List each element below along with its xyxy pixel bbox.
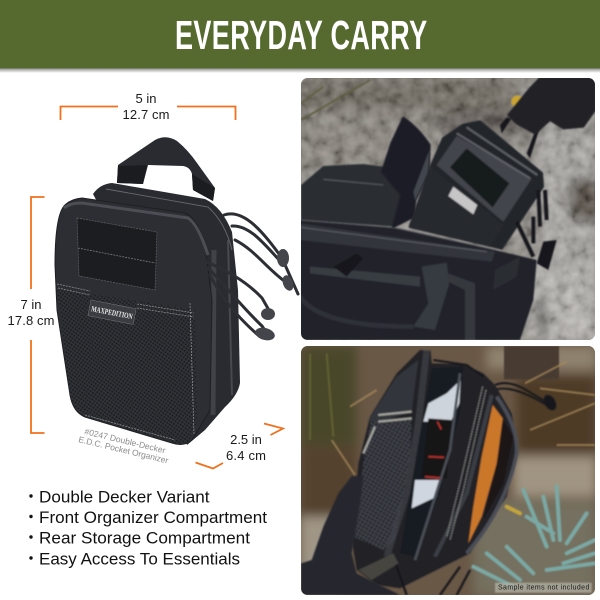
zipper cords xyxy=(207,214,298,335)
photo garden background xyxy=(300,346,597,597)
depth dimension xyxy=(196,424,283,468)
ground texture xyxy=(301,78,595,340)
pouch rear panel xyxy=(93,183,240,445)
feature list: Easy Access To Essentials xyxy=(39,550,240,568)
height dimension xyxy=(8,197,54,433)
pouch front panel xyxy=(55,198,212,444)
brand label xyxy=(88,300,136,324)
velcro patch xyxy=(77,218,157,290)
product caption: #0247 Double-Decker xyxy=(84,426,167,455)
height dimension: 7 in xyxy=(21,297,41,312)
succulent plant xyxy=(473,487,595,587)
pouch in bag xyxy=(410,117,557,270)
feature list: Rear Storage Compartment xyxy=(39,528,250,548)
feature list: Front Organizer Compartment xyxy=(39,508,267,527)
width dimension xyxy=(60,91,236,122)
title: EVERYDAY CARRY xyxy=(175,14,427,58)
brand label: MAXPEDITION xyxy=(90,304,134,321)
depth dimension: 2.5 in xyxy=(230,432,262,447)
feature list xyxy=(29,488,267,568)
feature list: Double Decker Variant xyxy=(39,488,210,506)
photo: open pouch held in hand xyxy=(300,346,597,597)
depth dimension: 6.4 cm xyxy=(226,448,266,463)
photo note: Sample items not included xyxy=(498,585,589,592)
height dimension: 17.8 cm xyxy=(8,313,54,328)
width dimension: 5 in xyxy=(136,91,156,106)
range bag xyxy=(300,164,537,340)
zipper pull cords xyxy=(433,360,548,405)
product caption: E.D.C. Pocket Organizer xyxy=(78,434,169,465)
orange lining xyxy=(468,405,503,543)
open pouch xyxy=(352,350,559,595)
zipper edges xyxy=(387,351,427,557)
photo ground background xyxy=(300,78,600,343)
pouch interior xyxy=(400,367,463,557)
width dimension: 12.7 cm xyxy=(122,107,170,122)
dry grass xyxy=(310,353,595,475)
photo: pouch pulled from range bag xyxy=(300,78,600,343)
gloved hand holding pouch xyxy=(301,476,400,595)
mesh pocket xyxy=(57,288,197,444)
header banner xyxy=(0,0,600,73)
pouch handle xyxy=(117,137,215,201)
gloved hand xyxy=(508,78,595,133)
photo note xyxy=(495,583,592,593)
product photo: organizer pouch xyxy=(55,137,298,445)
cord knots xyxy=(254,249,295,342)
open flap xyxy=(382,118,429,227)
